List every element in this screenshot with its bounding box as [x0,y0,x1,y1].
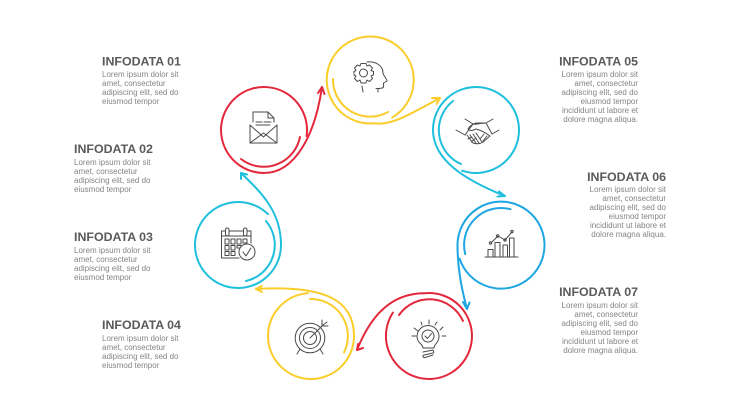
text: infodata 07: Lorem ipsum dolor sit [562,301,639,310]
text: infodata 07: adipiscing elit, sed do [562,319,639,328]
text: infodata 05: Lorem ipsum dolor sit [562,70,639,79]
text: infodata 01: adipiscing elit, sed do [102,88,179,97]
text: infodata 02: amet, consectetur [74,167,138,176]
text: infodata 01: INFODATA 01 [102,54,181,68]
text: infodata 06: adipiscing elit, sed do [590,203,667,212]
text: infodata 01: eiusmod tempor [102,97,160,106]
text: infodata 01 [102,54,181,106]
step 01 ring: red [221,87,324,173]
icon: calendar with check [222,228,255,260]
text: infodata 03: INFODATA 03 [74,230,153,244]
step 02 ring: yellow [327,36,440,124]
text: infodata 07: eiusmod tempor [581,328,638,337]
text: infodata 03: eiusmod tempor [74,273,132,282]
icon: light bulb [412,320,446,358]
text: infodata 06: Lorem ipsum dolor sit [590,185,667,194]
text: infodata 04: Lorem ipsum dolor sit [102,334,179,343]
icon: handshake [456,119,499,144]
text: infodata 04: eiusmod tempor [102,361,160,370]
step 05 ring: red [357,293,472,379]
text: infodata 04 [102,318,181,370]
step 06 ring: yellow [256,286,354,379]
text: infodata 07: dolore magna aliqua. [563,346,638,355]
text: infodata 03: amet, consectetur [74,255,138,264]
text: infodata 06: amet, consectetur [602,194,666,203]
text: infodata 07: incididunt ut labore et [562,337,639,346]
icon: head with gear [354,62,387,92]
text: infodata 01: amet, consectetur [102,79,166,88]
text: infodata 05: eiusmod tempor [581,97,638,106]
text: infodata 02: adipiscing elit, sed do [74,176,151,185]
text: infodata 06: dolore magna aliqua. [591,230,666,239]
text: infodata 06 [587,170,667,239]
text: infodata 02: INFODATA 02 [74,142,153,156]
text: infodata 06: INFODATA 06 [587,170,666,184]
text: infodata 07: amet, consectetur [574,310,638,319]
text: infodata 05 [559,54,639,124]
text: infodata 03: Lorem ipsum dolor sit [74,246,151,255]
icon: target with arrow [295,320,328,354]
text: infodata 01: Lorem ipsum dolor sit [102,70,179,79]
icon: envelope with letter [250,112,277,143]
step 03 ring: cyan [433,87,519,196]
text: infodata 04: amet, consectetur [102,343,166,352]
text: infodata 04: INFODATA 04 [102,318,181,332]
step 07 ring: cyan [195,173,281,288]
text: infodata 05: dolore magna aliqua. [563,115,638,124]
text: infodata 02: eiusmod tempor [74,185,132,194]
text: infodata 05: INFODATA 05 [559,54,638,68]
text: infodata 05: adipiscing elit, sed do [562,88,639,97]
text: infodata 02: Lorem ipsum dolor sit [74,158,151,167]
text: infodata 03: adipiscing elit, sed do [74,264,151,273]
text: infodata 05: amet, consectetur [574,79,638,88]
icon: bar chart [485,230,518,257]
text: infodata 05: incididunt ut labore et [562,106,639,115]
text: infodata 06: eiusmod tempor [609,212,666,221]
text: infodata 07 [559,285,639,355]
step 04 ring: blue [458,202,544,309]
text: infodata 03 [74,230,153,282]
text: infodata 06: incididunt ut labore et [590,221,667,230]
text: infodata 04: adipiscing elit, sed do [102,352,179,361]
text: infodata 07: INFODATA 07 [559,285,638,299]
text: infodata 02 [74,142,153,194]
